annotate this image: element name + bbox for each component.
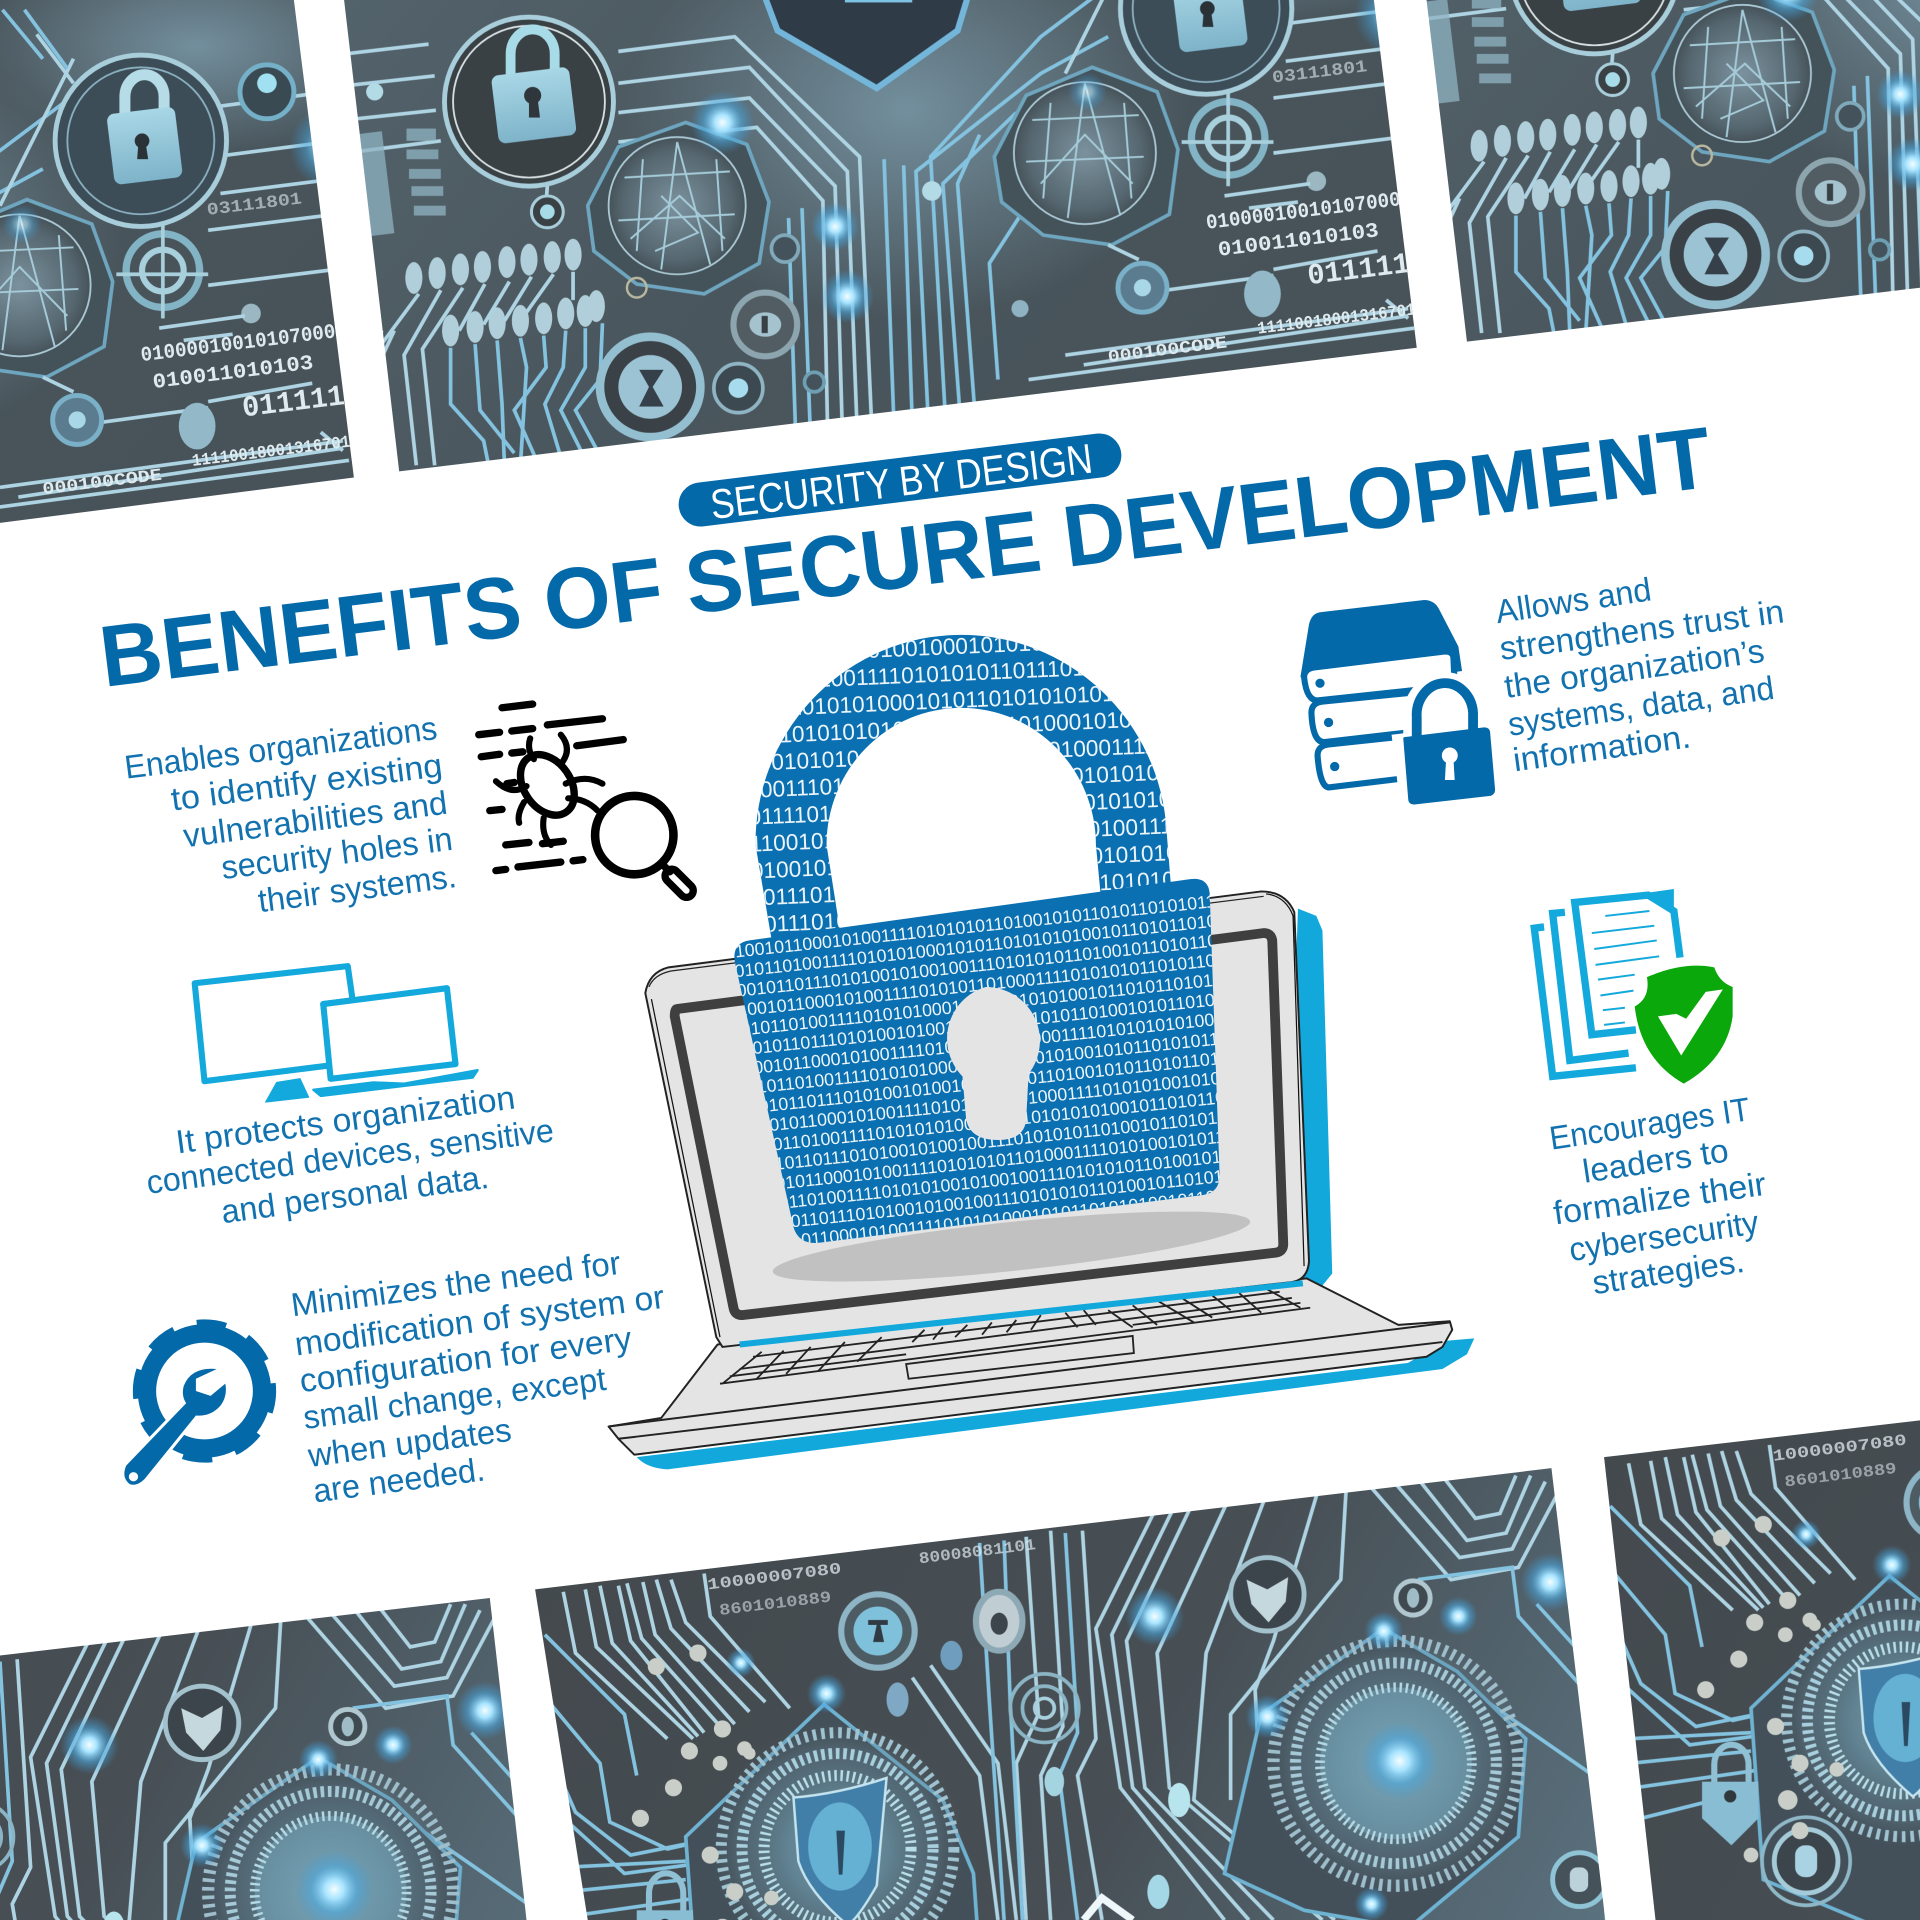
padlock body bbox=[734, 879, 1220, 1243]
binary pattern on padlock body: 1100101100010100111101010100010101101010100101101010101101010 bbox=[752, 1173, 1343, 1255]
text block: strengthens trust: systems, data, and bbox=[1506, 670, 1776, 744]
binary pattern on padlock shackle bbox=[756, 636, 1170, 932]
binary pattern on padlock shackle: 0100111010101010101010101010101010010010 bbox=[734, 756, 1235, 803]
binary code text: 8601010889 bbox=[718, 1588, 832, 1620]
binary pattern on padlock shackle: 1101110101010101010101010101010101001011 bbox=[739, 863, 1237, 911]
padlock shackle bbox=[756, 635, 1173, 967]
panel: top right circuit image bbox=[1427, 0, 1920, 342]
binary code text: 01000010010107000 bbox=[140, 321, 337, 368]
binary pattern on padlock body: 1100101100010100111101010110100011110101010110101100101010110 bbox=[728, 940, 1313, 1021]
binary code text: 10000007080 bbox=[1772, 1431, 1908, 1466]
lock shadow bbox=[770, 1197, 1253, 1296]
binary pattern on padlock shackle: 1000101010101010101010101010001111101010 bbox=[733, 729, 1231, 777]
text block: identify vulnerabilities: to identify existing bbox=[169, 747, 445, 819]
binary pattern on padlock shackle: 1010010101010101010101010101010101001010 bbox=[738, 836, 1242, 884]
binary code text bbox=[1774, 1434, 1906, 1486]
binary pattern on padlock body: 1100101100010100111101010101101000111101010101010011010101010 bbox=[734, 998, 1322, 1080]
text block: minimizes modification: when updates bbox=[305, 1412, 514, 1475]
binary pattern on padlock shackle: 0101010100111101010101101110101011010001 bbox=[730, 648, 1222, 696]
binary pattern on padlock shackle: 1010100010101001000101010100010101011010 bbox=[728, 621, 1231, 669]
binary pattern on padlock body: 0101011011101010010100100111010101011010010110101011010101010 bbox=[744, 1095, 1335, 1177]
binary pattern on padlock body: 1010110100111101010100101001001110101010110100101011010101011 bbox=[748, 1134, 1338, 1216]
binary code text: 8601010889 bbox=[1784, 1460, 1898, 1491]
text block: identify vulnerabilities: security holes in bbox=[219, 821, 455, 887]
binary code text bbox=[43, 192, 350, 494]
panel: bottom left circuit image bbox=[0, 1598, 527, 1920]
binary pattern on padlock body: 100101100010100111101010101101001010110101101010110101010010 bbox=[734, 881, 1315, 961]
text block: minimizes modification bbox=[289, 1245, 667, 1510]
badge: security by design: SECURITY BY DESIGN bbox=[708, 435, 1095, 528]
binary code text: 03111801 bbox=[206, 190, 303, 221]
binary pattern on padlock body: 1010110100111101010100010101101010100101101011010101011010101 bbox=[730, 959, 1320, 1041]
binary code text: 000100CODE bbox=[42, 467, 163, 500]
text block: encourages IT leaders bbox=[1547, 1091, 1768, 1302]
binary code text: 01000010010107000 bbox=[1205, 189, 1402, 236]
binary code text: 11110018001316701 bbox=[191, 434, 351, 472]
title: BENEFITS OF SECURE DEVELOPMENT bbox=[94, 409, 1716, 706]
icon: gear and wrench bbox=[124, 1326, 269, 1485]
text block: minimizes modification: modification of system or bbox=[293, 1279, 667, 1363]
binary pattern on padlock body: 1100101100010100111101010101101000111101010100101011010101010 bbox=[740, 1057, 1328, 1138]
binary pattern on padlock body: 1010110100111101010100010101101010100101011010101101010100101 bbox=[736, 1017, 1328, 1099]
laptop bezel sketch lines bbox=[651, 894, 1304, 1337]
panel: top centre circuit image bbox=[344, 0, 1418, 471]
binary pattern on padlock body: 1100101100010100111101010101101000111101010010101101010101010 bbox=[746, 1115, 1334, 1197]
laptop base bbox=[609, 1278, 1452, 1455]
laptop blue shadow bbox=[637, 909, 1474, 1469]
panel: bottom centre circuit image bbox=[535, 1468, 1605, 1920]
binary pattern on padlock body bbox=[736, 895, 1220, 1243]
text block: encourages IT leaders: strategies. bbox=[1590, 1243, 1747, 1302]
binary pattern on padlock body: 0101011011101010010100100111010101011010010101101011010110101 bbox=[732, 979, 1321, 1060]
text block: identify vulnerabilities: vulnerabilities and bbox=[181, 785, 449, 855]
binary code text: 011111 bbox=[1306, 248, 1412, 293]
binary code text: 010011010103 bbox=[1217, 220, 1380, 263]
text block: strengthens trust: information. bbox=[1511, 718, 1693, 779]
binary pattern on padlock body: 0101011011101010010100100111010101011010010110101011010101010 bbox=[750, 1154, 1341, 1236]
binary code text bbox=[708, 1539, 1036, 1614]
binary pattern on padlock shackle: 1101110101010101010101010101010101001011 bbox=[740, 890, 1238, 938]
binary pattern on padlock body: 1010110100111101010100010101101010101001011010110101001011010 bbox=[724, 901, 1314, 982]
panel: bottom right circuit image bbox=[1604, 1420, 1920, 1920]
text block: encourages IT leaders: cybersecurity bbox=[1567, 1204, 1762, 1269]
text block: identify vulnerabilities: their systems. bbox=[256, 858, 459, 920]
icon: monitor and laptop devices bbox=[195, 966, 478, 1102]
panel: top left circuit image bbox=[0, 0, 354, 523]
binary code text: 010011010103 bbox=[152, 353, 315, 395]
binary code text: 80008081101 bbox=[918, 1536, 1037, 1568]
binary pattern on padlock shackle: 1110101010101010101010101000101001010100 bbox=[732, 702, 1233, 750]
binary pattern on padlock body: 1001011011101010010100100111010101011010010110101101010100101 bbox=[726, 920, 1316, 1002]
text block: strengthens trust bbox=[1493, 571, 1786, 779]
text block: encourages IT leaders: Encourages IT bbox=[1547, 1091, 1752, 1158]
binary pattern on padlock body: 1010110100111101010101001010110101010100101101011010101010010 bbox=[742, 1076, 1334, 1158]
icon: server stack with padlock bbox=[1300, 600, 1494, 808]
binary pattern on padlock body: 0101011011101010010100100111010110100101011010110101010010101 bbox=[738, 1037, 1329, 1119]
binary code text: 10000007080 bbox=[706, 1560, 842, 1594]
padlock keyhole bbox=[947, 987, 1040, 1140]
text block: identify vulnerabilities: Enables organizations bbox=[122, 710, 439, 787]
binary code text bbox=[1108, 60, 1412, 362]
text block: minimizes modification: configuration for every bbox=[297, 1320, 634, 1400]
illustration: laptop with binary padlock bbox=[609, 621, 1474, 1469]
binary code text: 011111 bbox=[240, 380, 347, 425]
text block: encourages IT leaders: leaders to bbox=[1580, 1132, 1731, 1191]
binary code text: 11110018001316701 bbox=[1256, 301, 1417, 340]
laptop lid bbox=[645, 891, 1309, 1347]
text block: protects devices: and personal data. bbox=[219, 1159, 491, 1231]
text block: protects devices: It protects organization bbox=[174, 1080, 517, 1161]
text block: minimizes modification: Minimizes the need for bbox=[289, 1245, 623, 1324]
binary code text: 000100CODE bbox=[1107, 334, 1228, 368]
text block: minimizes modification: small change, except bbox=[301, 1361, 608, 1437]
text block: protects devices bbox=[144, 1080, 556, 1231]
icon: documents with green shield bbox=[1534, 889, 1733, 1084]
text block: identify vulnerabilities bbox=[122, 710, 459, 920]
binary pattern on padlock shackle: 1111010101010001010110101010101010101010 bbox=[731, 675, 1228, 723]
text block: strengthens trust: Allows and bbox=[1493, 571, 1654, 631]
text block: minimizes modification: are needed. bbox=[311, 1451, 487, 1510]
binary code text: 03111801 bbox=[1271, 58, 1368, 89]
binary pattern on padlock body: 1010110100111101010100101001001110101010110100101011010101011 bbox=[755, 1193, 1344, 1275]
text block: encourages IT leaders: formalize their bbox=[1551, 1166, 1768, 1232]
icon: bug and magnifier bbox=[479, 704, 696, 900]
text block: strengthens trust: the organization’s bbox=[1502, 633, 1767, 706]
binary pattern on padlock shackle: 1011110101010101010101010101010101010101 bbox=[735, 783, 1235, 830]
text block: strengthens trust: strengthens trust in bbox=[1497, 593, 1786, 668]
text block: protects devices: connected devices, sensitive bbox=[144, 1112, 556, 1202]
binary pattern on padlock shackle: 0110010101010101010101010101010011110010 bbox=[737, 810, 1234, 857]
